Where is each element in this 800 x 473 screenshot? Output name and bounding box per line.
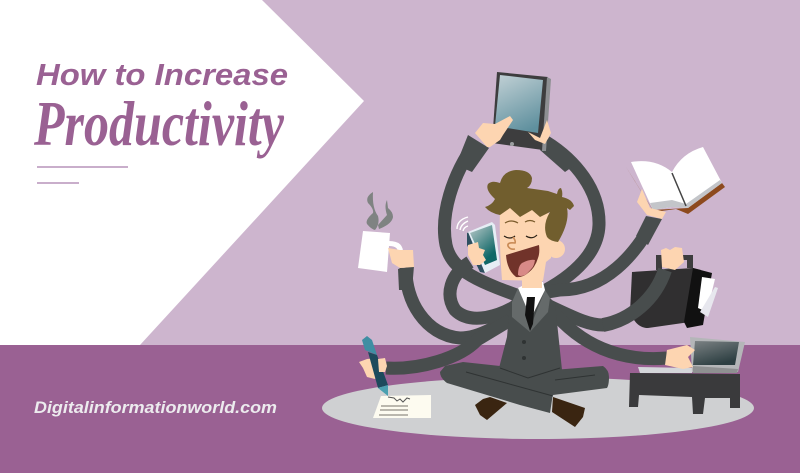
hand holding pen	[359, 358, 380, 379]
phone	[467, 222, 500, 273]
crossed legs	[440, 362, 609, 413]
hand on mug	[388, 248, 414, 268]
thumb on pen	[378, 358, 387, 372]
shirt and tie	[518, 282, 545, 331]
ear	[547, 240, 565, 258]
floor band	[0, 345, 800, 473]
pen	[362, 336, 388, 396]
tablet	[492, 72, 551, 151]
open book	[626, 147, 725, 214]
coffee mug	[358, 231, 403, 272]
head	[485, 170, 574, 288]
floor mat	[322, 377, 754, 439]
shoes	[475, 397, 585, 427]
steam	[367, 192, 393, 230]
title: Productivity	[33, 88, 284, 159]
laptop	[638, 337, 745, 373]
hand on laptop	[665, 345, 695, 369]
eyes and nose	[504, 220, 537, 249]
footer url: Digitalinformationworld.com	[34, 398, 277, 417]
torso	[498, 288, 562, 382]
hand holding book	[637, 189, 666, 219]
title	[33, 57, 288, 159]
hand on briefcase	[661, 247, 684, 270]
mouth	[506, 245, 539, 277]
hand on phone	[468, 242, 486, 265]
arms	[386, 142, 667, 368]
phone signal	[457, 217, 468, 231]
tapered sleeve ends	[398, 135, 673, 292]
hands on tablet	[475, 116, 551, 147]
briefcase arm overlay	[603, 270, 665, 325]
briefcase	[630, 255, 718, 328]
neck	[522, 270, 542, 288]
title rules	[37, 166, 128, 184]
document	[373, 395, 431, 418]
face	[500, 208, 552, 281]
white arrow panel	[0, 0, 364, 345]
tongue	[518, 260, 535, 276]
hair	[485, 170, 574, 242]
side table	[629, 373, 740, 414]
title: How to Increase	[36, 57, 288, 92]
